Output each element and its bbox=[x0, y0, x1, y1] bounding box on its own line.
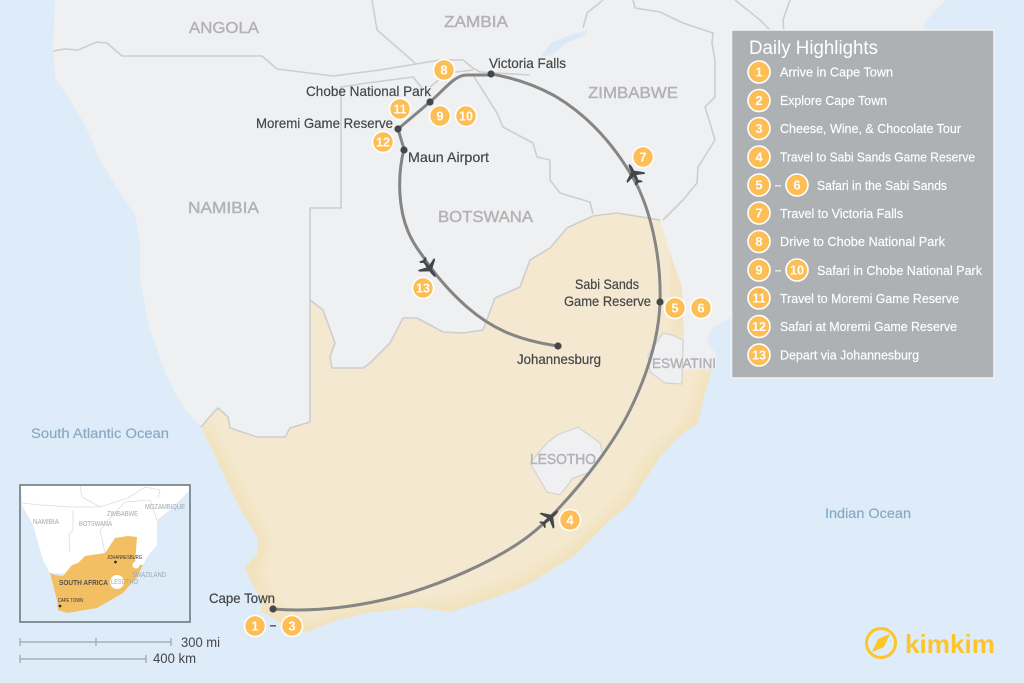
badge: day 4 bbox=[560, 510, 580, 530]
badge: day 5: 5 bbox=[671, 300, 679, 316]
stop: Johannesburg: Johannesburg bbox=[517, 351, 601, 367]
inset label: Namibia: NAMIBIA bbox=[33, 519, 59, 526]
item 11: 11 bbox=[752, 290, 766, 306]
inset label: Zimbabwe: ZIMBABWE bbox=[107, 511, 138, 518]
inset label: Botswana: BOTSWANA bbox=[79, 521, 112, 528]
badge: days 1 to 3: 1 bbox=[251, 618, 259, 634]
land mass bbox=[53, 0, 945, 440]
country: South Africa bbox=[201, 213, 712, 632]
label: Zimbabwe: ZIMBABWE bbox=[588, 85, 678, 102]
badge: day 4: 4 bbox=[566, 512, 574, 528]
country: Eswatini bbox=[648, 333, 683, 384]
item 4 bbox=[748, 146, 975, 168]
badge: day 6 bbox=[690, 298, 712, 318]
item 8: 8 bbox=[755, 234, 763, 249]
item 4: Travel to Sabi Sands Game Reserve bbox=[780, 150, 975, 164]
panel: daily highlights bbox=[732, 30, 994, 378]
item 4: 4 bbox=[755, 150, 763, 164]
label: South Atlantic Ocean: South Atlantic Ocean bbox=[31, 425, 169, 441]
scale bar: miles: 300 mi bbox=[181, 635, 220, 650]
item 9-10: Safari in Chobe National Park bbox=[817, 263, 982, 278]
inset label: Swaziland: SWAZILAND bbox=[132, 572, 166, 579]
item 11 bbox=[748, 287, 959, 309]
badge: day 9 bbox=[430, 106, 450, 126]
inset South Africa bbox=[50, 536, 143, 613]
badge: day 5 bbox=[664, 298, 686, 318]
country: Lesotho bbox=[530, 427, 603, 495]
stop: Moremi Game Reserve: Moremi Game Reserve bbox=[256, 115, 393, 131]
stop: Victoria Falls: Victoria Falls bbox=[489, 55, 566, 71]
item 13: 13 bbox=[752, 348, 766, 362]
item 5-6: Safari in the Sabi Sands bbox=[817, 178, 947, 193]
inset land bbox=[21, 485, 190, 577]
item 9-10: 9 bbox=[755, 262, 763, 278]
inset city: Johannesburg: JOHANNESBURG bbox=[107, 555, 142, 561]
badge: day 10: 10 bbox=[459, 108, 473, 124]
item 3: 3 bbox=[755, 121, 763, 136]
item 5-6 bbox=[748, 174, 947, 196]
panel heading: Daily Highlights bbox=[749, 38, 878, 59]
scale bar: miles bbox=[20, 635, 220, 650]
stop: Sabi Sands Game Reserve bbox=[564, 276, 664, 309]
route: drive Victoria Falls to Maun bbox=[398, 75, 491, 149]
badge: day 12: 12 bbox=[376, 134, 390, 150]
item 11: Travel to Moremi Game Reserve bbox=[780, 291, 959, 306]
badge: day 7: 7 bbox=[639, 150, 647, 164]
badge: day 7 bbox=[632, 146, 654, 168]
inset Swaziland bbox=[132, 562, 140, 568]
badge: day 12 bbox=[372, 132, 394, 152]
item 2: Explore Cape Town bbox=[780, 93, 887, 108]
label: Angola: ANGOLA bbox=[189, 20, 259, 37]
badge: day 11: 11 bbox=[394, 102, 406, 116]
item 12: 12 bbox=[752, 319, 766, 334]
item 7 bbox=[748, 202, 903, 224]
badge: day 11 bbox=[390, 98, 410, 120]
item 9-10 bbox=[748, 259, 982, 281]
badge: day 9: 9 bbox=[436, 108, 444, 124]
label: Eswatini: ESWATINI bbox=[652, 356, 716, 371]
scale bar: kilometres: 400 km bbox=[153, 651, 196, 666]
inset city: Johannesburg bbox=[107, 555, 142, 563]
item 7: Travel to Victoria Falls bbox=[780, 206, 903, 221]
label: Indian Ocean: Indian Ocean bbox=[825, 505, 911, 521]
item 5-6: 6 bbox=[793, 178, 801, 192]
icon: plane to Johannesburg bbox=[414, 253, 444, 283]
badge: day 8: 8 bbox=[440, 62, 448, 78]
item 12: Safari at Moremi Game Reserve bbox=[780, 319, 957, 334]
stop: Maun Airport: Maun Airport bbox=[408, 149, 489, 165]
label: Lesotho: LESOTHO bbox=[530, 452, 596, 468]
badge: day 10 bbox=[456, 106, 476, 126]
item 13: Depart via Johannesburg bbox=[780, 348, 919, 362]
stop: Johannesburg bbox=[517, 342, 601, 367]
item 2: 2 bbox=[755, 93, 763, 108]
route: flight Maun to Johannesburg bbox=[400, 149, 558, 346]
stop: Sabi Sands Game Reserve: Game Reserve bbox=[564, 293, 651, 309]
item 12 bbox=[748, 316, 957, 338]
badge: day 13 bbox=[412, 278, 434, 298]
label: Botswana: BOTSWANA bbox=[438, 209, 533, 226]
badge: days 1 to 3 bbox=[244, 616, 302, 636]
stop: Chobe National Park: Chobe National Park bbox=[306, 83, 432, 99]
icon: compass bbox=[866, 628, 896, 658]
logo wordmark: kimkim bbox=[905, 629, 995, 659]
scale bar: kilometres bbox=[20, 651, 196, 666]
item 9-10: 10 bbox=[790, 262, 804, 278]
inset label: Lesotho: LESOTHO bbox=[111, 579, 138, 586]
item 13 bbox=[748, 344, 919, 366]
inset city: Cape Town: CAPE TOWN bbox=[58, 598, 83, 604]
badge: day 6: 6 bbox=[697, 300, 705, 316]
item 8: Drive to Chobe National Park bbox=[780, 234, 945, 249]
label: Zambia: ZAMBIA bbox=[444, 14, 508, 31]
icon: plane to Victoria Falls bbox=[620, 160, 648, 188]
stop: Sabi Sands Game Reserve: Sabi Sands bbox=[575, 276, 639, 292]
inset label: Mozambique: MOZAMBIQUE bbox=[145, 504, 185, 511]
inset Lesotho bbox=[110, 575, 124, 589]
route: flight Cape Town to Victoria Falls bbox=[273, 74, 660, 610]
item 1: Arrive in Cape Town bbox=[780, 64, 893, 80]
country borders bbox=[53, 0, 790, 437]
inset city: Cape Town bbox=[58, 598, 83, 607]
inset locator map bbox=[20, 485, 190, 622]
stop: Cape Town: Cape Town bbox=[209, 590, 275, 606]
item 3 bbox=[748, 118, 962, 140]
stop: Victoria Falls bbox=[487, 55, 566, 78]
item 8 bbox=[748, 230, 945, 252]
item 3: Cheese, Wine, & Chocolate Tour bbox=[780, 121, 962, 136]
stop: Cape Town bbox=[209, 590, 277, 613]
icon: plane to Sabi Sands bbox=[535, 503, 565, 533]
item 2 bbox=[748, 90, 887, 112]
inset borders bbox=[22, 485, 160, 553]
item 5-6: 5 bbox=[755, 178, 763, 192]
item 7: 7 bbox=[755, 206, 763, 220]
inset label: South Africa: SOUTH AFRICA bbox=[59, 578, 109, 587]
item 1 bbox=[748, 61, 893, 83]
lake kariba bbox=[540, 30, 588, 57]
label: Namibia: NAMIBIA bbox=[188, 200, 259, 217]
item 1: 1 bbox=[755, 64, 763, 80]
badge: day 8 bbox=[434, 60, 454, 80]
logo: kimkim bbox=[866, 628, 995, 659]
inset frame bbox=[20, 485, 190, 622]
badge: days 1 to 3: 3 bbox=[288, 618, 296, 634]
badge: day 13: 13 bbox=[416, 280, 430, 296]
